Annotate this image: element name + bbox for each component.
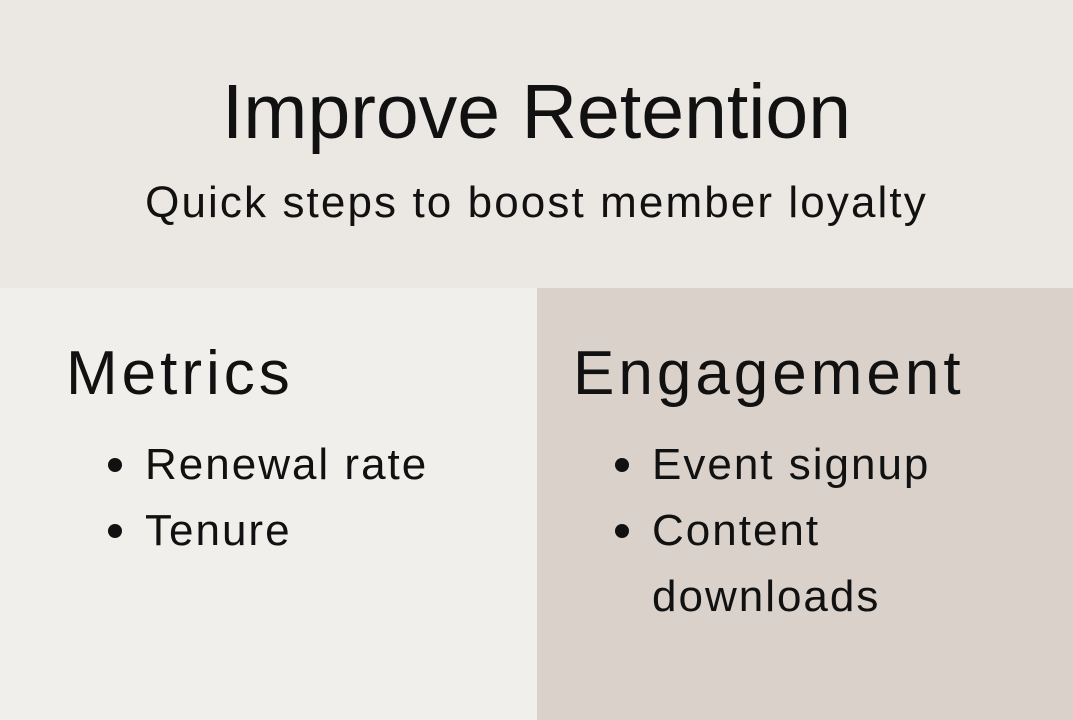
- header band: [0, 0, 1073, 288]
- list: engagement: downloads: [652, 572, 880, 621]
- heading: metrics: Metrics: [66, 339, 294, 408]
- list: metrics: Renewal rate: [145, 440, 428, 489]
- list: metrics: Tenure: [145, 506, 292, 555]
- subtitle: Quick steps to boost member loyalty: [145, 178, 928, 227]
- list: engagement: [615, 440, 930, 621]
- panel: metrics: [0, 288, 537, 720]
- list: metrics: [108, 440, 428, 555]
- title: Improve Retention: [222, 69, 851, 155]
- heading: engagement: Engagement: [573, 339, 965, 408]
- panel: engagement: [537, 288, 1073, 720]
- list: engagement: Event signup: [652, 440, 930, 489]
- list: engagement: Content: [652, 506, 820, 555]
